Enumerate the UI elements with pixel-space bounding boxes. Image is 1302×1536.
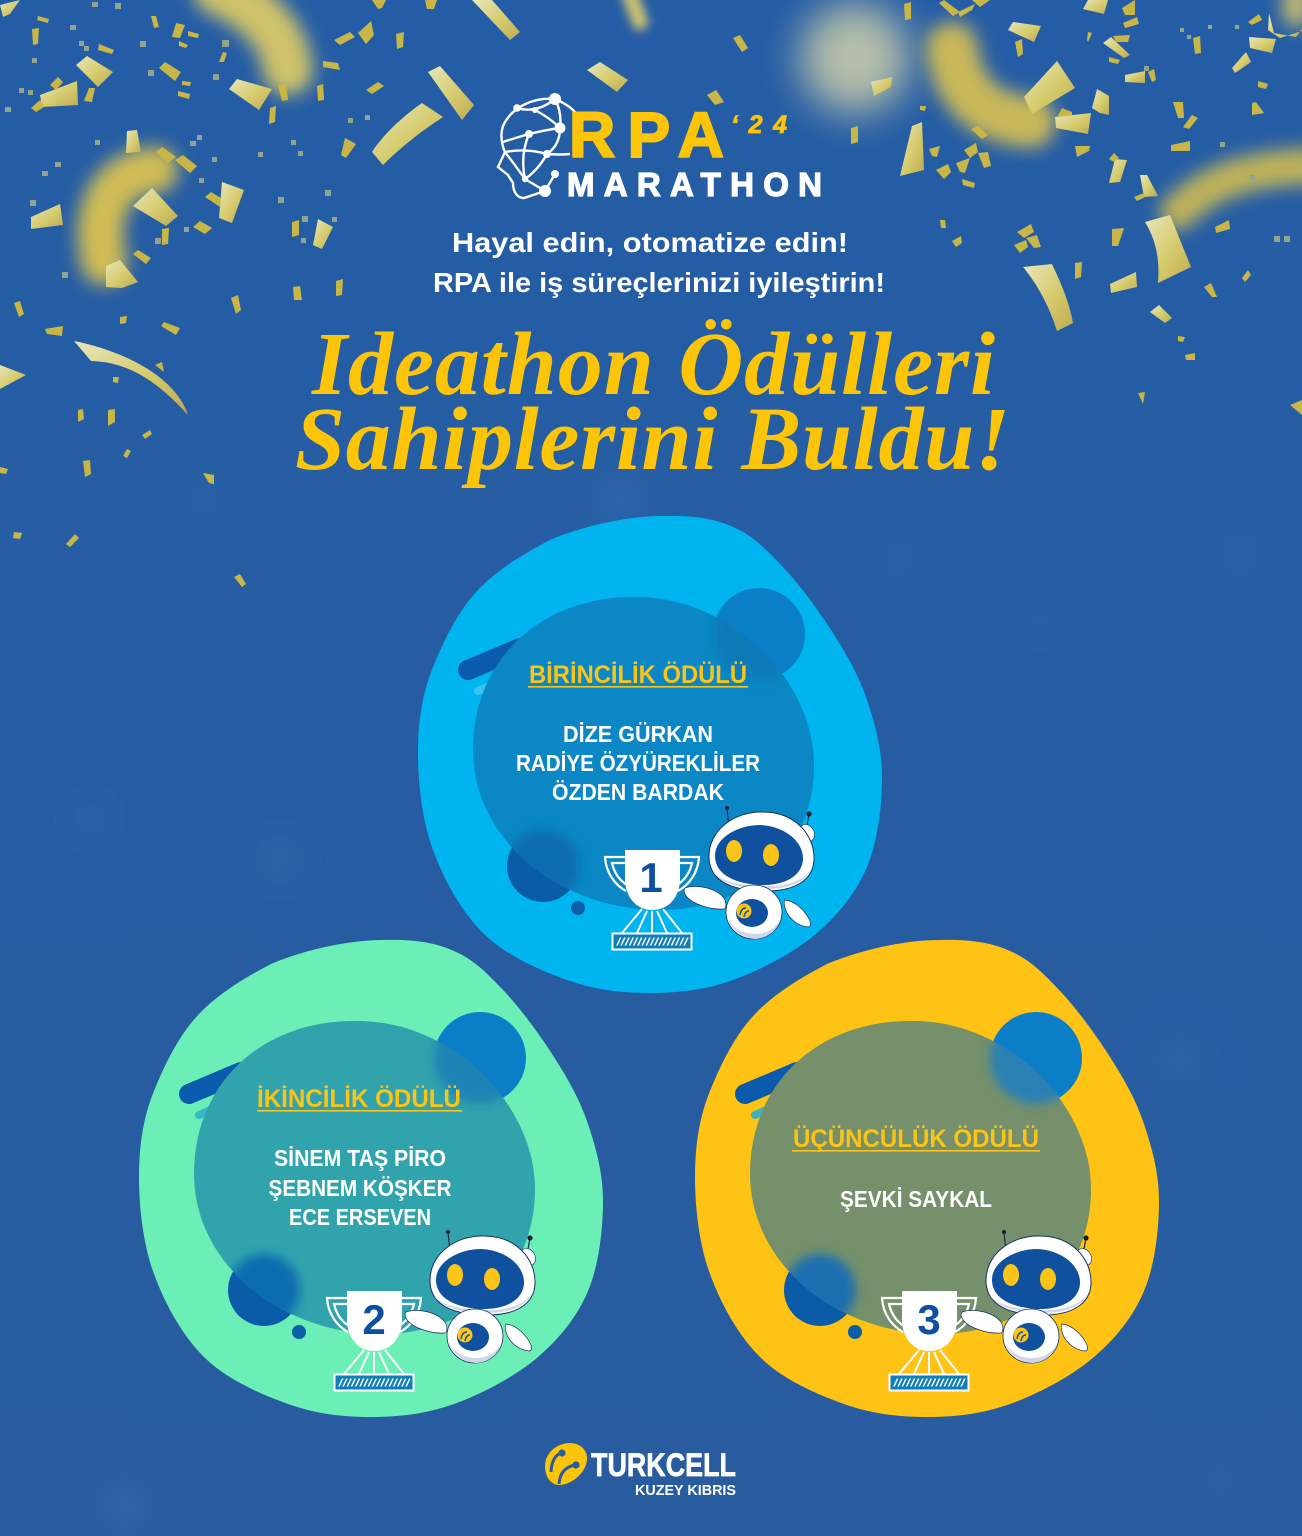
icon: trophy 1: 1 (639, 854, 663, 901)
wordmark MARATHON: MARATHON (567, 166, 822, 203)
panel: first prize (418, 516, 882, 993)
tagline (433, 227, 885, 298)
blurred confetti ribbons (101, 0, 1302, 262)
winners: third prize: ŞEVKİ SAYKAL (840, 1186, 992, 1212)
winners: first prize: DİZE GÜRKAN (563, 721, 713, 747)
panel: second prize (139, 940, 603, 1417)
winners: second prize: ŞEBNEM KÖŞKER (268, 1175, 452, 1201)
icon: robot (405, 1230, 539, 1363)
icon: trophy 1 (605, 850, 699, 950)
panel: third prize (695, 940, 1159, 1417)
winners: first prize: RADİYE ÖZYÜREKLİLER (516, 750, 760, 776)
icon: trophy 3 (882, 1291, 976, 1390)
icon: trophy 3: 3 (917, 1296, 941, 1343)
winners: first prize: ÖZDEN BARDAK (552, 779, 724, 805)
heading: third prize: ÜÇÜNCÜLÜK ÖDÜLÜ (793, 1124, 1039, 1153)
title: Ideathon Ödülleri (311, 315, 995, 414)
wordmark KUZEY KIBRIS: KUZEY KIBRIS (635, 1483, 736, 1499)
icon: trophy 2 (327, 1291, 421, 1390)
heading: second prize: İKİNCİLİK ÖDÜLÜ (257, 1084, 461, 1113)
icon: robot (961, 1230, 1095, 1363)
icon: robot (684, 806, 818, 939)
winners: second prize (268, 1145, 452, 1230)
wordmark year: ‘24 (731, 111, 787, 139)
title (295, 315, 1010, 489)
tagline: RPA ile iş süreçlerinizi iyileştirin! (433, 267, 885, 298)
winners: first prize (516, 721, 760, 805)
logo: Turkcell Kuzey Kıbrıs (545, 1443, 736, 1499)
wordmark TURKCELL: TURKCELL (591, 1447, 736, 1483)
small dim confetti specks (5, 2, 1290, 278)
heading: first prize: BİRİNCİLİK ÖDÜLÜ (529, 660, 747, 689)
winners: second prize: SİNEM TAŞ PİRO (274, 1145, 446, 1171)
winners: second prize: ECE ERSEVEN (289, 1204, 431, 1230)
small confetti pieces (0, 0, 1302, 587)
title: Sahiplerini Buldu! (295, 390, 1010, 489)
tagline: Hayal edin, otomatize edin! (452, 227, 848, 258)
wordmark RPA: RPA (569, 99, 724, 171)
bokeh background spots (72, 474, 1260, 1531)
icon: trophy 2: 2 (362, 1296, 386, 1343)
logo: RPA Marathon '24 (498, 93, 822, 203)
icon: network head (498, 93, 579, 198)
large confetti pieces (0, 0, 1302, 415)
icon: Turkcell mark (545, 1443, 587, 1485)
